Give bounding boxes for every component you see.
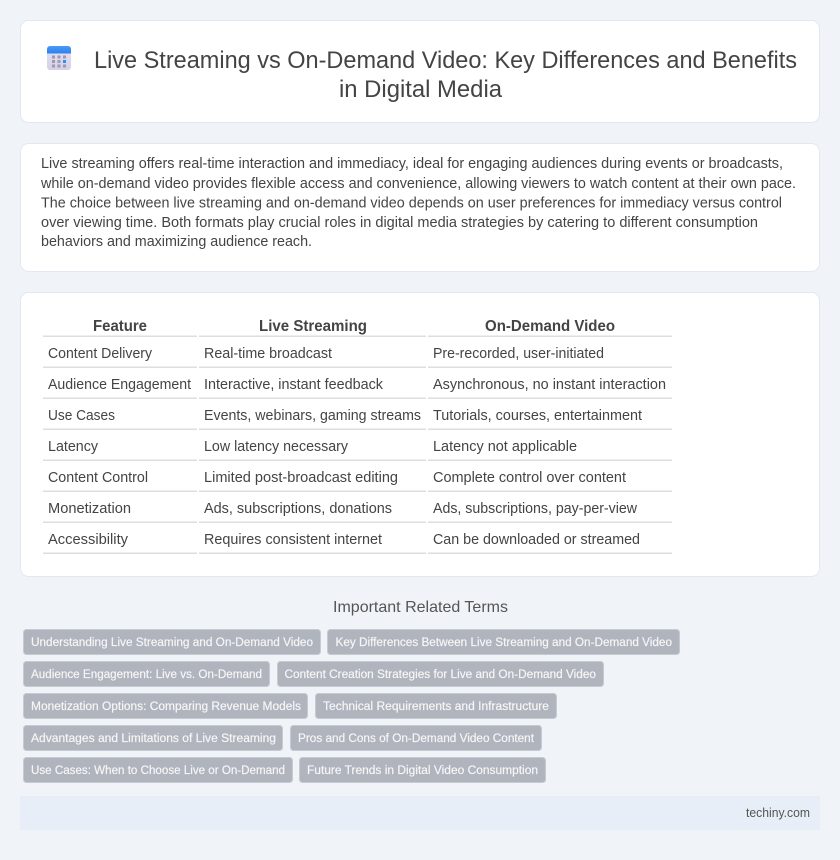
heading: important related terms: Important Related Terms <box>333 599 508 616</box>
panel: summary paragraph <box>20 144 820 272</box>
table row: use cases: Events, webinars, gaming streams <box>204 408 421 424</box>
tag: Future Trends in Digital Video Consumption <box>307 763 538 777</box>
table row: accessibility: Can be downloaded or streamed <box>433 532 640 548</box>
panel: title header <box>20 20 820 122</box>
table row: content delivery <box>43 346 672 368</box>
table row: content control: Limited post-broadcast editing <box>204 470 398 486</box>
table row: content control <box>43 470 672 492</box>
table row: content delivery: Real-time broadcast <box>204 346 332 362</box>
tag: Advantages and Limitations of Live Streaming <box>31 731 276 745</box>
table row: latency: Low latency necessary <box>204 439 349 455</box>
tag: Key Differences Between Live Streaming and On-Demand Video <box>336 635 672 649</box>
tag <box>316 694 556 718</box>
text block: summary: behaviors and maximizing audience reach. <box>41 234 312 250</box>
tag: Pros and Cons of On-Demand Video Content <box>298 731 535 745</box>
table row: accessibility <box>43 532 672 554</box>
tag <box>24 630 320 654</box>
table header row: Feature <box>93 318 147 335</box>
tag: Use Cases: When to Choose Live or On-Demand <box>31 763 285 777</box>
table row: use cases: Use Cases <box>48 408 115 424</box>
tag <box>24 662 270 686</box>
text block: summary: Live streaming offers real-time interaction and immediacy, ideal for engaging audiences during events or broadcasts, <box>41 156 783 172</box>
table header row <box>43 318 672 337</box>
table row: latency: Latency not applicable <box>433 439 577 455</box>
tag <box>300 758 546 782</box>
tag <box>328 630 680 654</box>
table header row: On-Demand Video <box>485 318 615 335</box>
tag: Audience Engagement: Live vs. On-Demand <box>31 667 262 681</box>
title: in Digital Media <box>339 76 503 103</box>
text block: summary: over viewing time. Both formats play crucial roles in digital media strategies by catering to different consumption <box>41 215 758 231</box>
table row: audience engagement: Asynchronous, no instant interaction <box>433 377 666 393</box>
table row: monetization <box>43 501 672 523</box>
tag: Monetization Options: Comparing Revenue Models <box>31 699 301 713</box>
table row: latency <box>43 439 672 461</box>
footer source text: techiny.com <box>746 805 810 820</box>
tag <box>278 662 604 686</box>
table row: content delivery: Pre-recorded, user-initiated <box>433 346 604 362</box>
title: Live Streaming vs On-Demand Video: Key Differences and Benefits <box>94 47 797 74</box>
tag <box>24 694 308 718</box>
text block: summary: The choice between live streaming and on-demand video depends on user preferences for immediacy versus control <box>41 196 782 212</box>
table row: monetization: Ads, subscriptions, pay-per-view <box>433 501 638 517</box>
table row: latency: Latency <box>48 439 99 455</box>
table row: content control: Content Control <box>48 470 148 486</box>
table row: use cases: Tutorials, courses, entertainment <box>433 408 642 424</box>
tag: Technical Requirements and Infrastructure <box>323 699 549 713</box>
tag: Content Creation Strategies for Live and On-Demand Video <box>284 667 596 681</box>
table row: use cases <box>43 408 672 430</box>
tag <box>24 758 292 782</box>
text block: summary <box>40 156 796 250</box>
table header row: Live Streaming <box>259 318 367 335</box>
text block: summary: while on-demand video provides flexible access and convenience, allowing viewers to watch content at their own pace. <box>40 176 796 192</box>
tag <box>24 726 282 750</box>
tag <box>290 726 542 750</box>
table row: content delivery: Content Delivery <box>48 346 153 362</box>
table row: accessibility: Accessibility <box>48 532 129 548</box>
table row: audience engagement: Audience Engagement <box>48 377 191 393</box>
table row: audience engagement: Interactive, instant feedback <box>204 377 384 393</box>
tag: Understanding Live Streaming and On-Demand Video <box>31 635 313 649</box>
title <box>94 47 797 103</box>
table row: content control: Complete control over content <box>433 470 626 486</box>
panel: comparison table <box>20 292 820 576</box>
tag list: related terms <box>24 630 680 782</box>
table row: audience engagement <box>43 377 672 399</box>
table row: monetization: Monetization <box>48 501 131 517</box>
footer <box>20 796 820 830</box>
table row: monetization: Ads, subscriptions, donations <box>204 501 392 517</box>
table row: accessibility: Requires consistent internet <box>204 532 382 548</box>
icon: calendar <box>47 46 71 70</box>
